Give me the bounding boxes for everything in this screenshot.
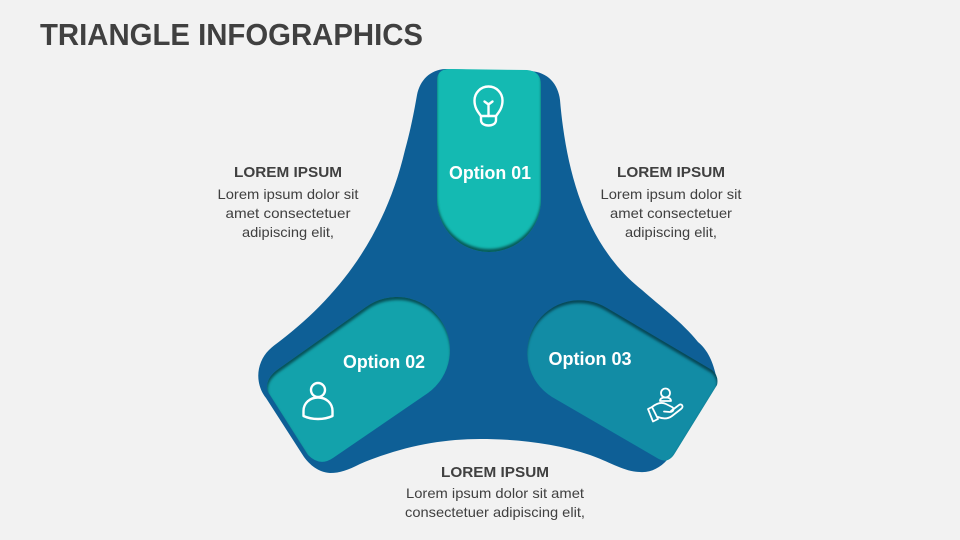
text block: left: LOREM IPSUM	[234, 164, 342, 181]
panel: option 03	[527, 300, 717, 461]
title: TRIANGLE INFOGRAPHICS	[40, 18, 423, 52]
option 02 label: Option 02	[343, 352, 425, 372]
text block: bottom: Lorem ipsum dolor sit amet	[406, 485, 584, 501]
text block: bottom: LOREM IPSUM	[441, 464, 549, 481]
icon: person	[304, 383, 332, 419]
text block: right: Lorem ipsum dolor sit	[600, 186, 742, 202]
panel: option 02	[267, 297, 450, 462]
text block: left: amet consectetuer	[226, 205, 351, 221]
text block: right: amet consectetuer	[610, 205, 732, 221]
option 03 label: Option 03	[548, 349, 632, 369]
text block: bottom: consectetuer adipiscing elit,	[405, 504, 585, 520]
option 01 tab	[437, 69, 541, 252]
option 02 tab	[267, 297, 450, 462]
text block: right	[600, 164, 742, 240]
text block: left	[218, 164, 359, 240]
icon: hand holding person	[648, 388, 682, 422]
option 01 label: Option 01	[449, 163, 531, 183]
icon: light bulb	[474, 86, 502, 126]
text block: bottom	[405, 464, 585, 520]
text block: left: adipiscing elit,	[242, 224, 334, 240]
text block: right: adipiscing elit,	[625, 224, 717, 240]
option 03 tab	[527, 300, 717, 461]
triangle base shape	[258, 69, 717, 473]
text block: left: Lorem ipsum dolor sit	[218, 186, 359, 202]
text block: right: LOREM IPSUM	[617, 164, 725, 181]
panel: option 01	[437, 69, 541, 252]
